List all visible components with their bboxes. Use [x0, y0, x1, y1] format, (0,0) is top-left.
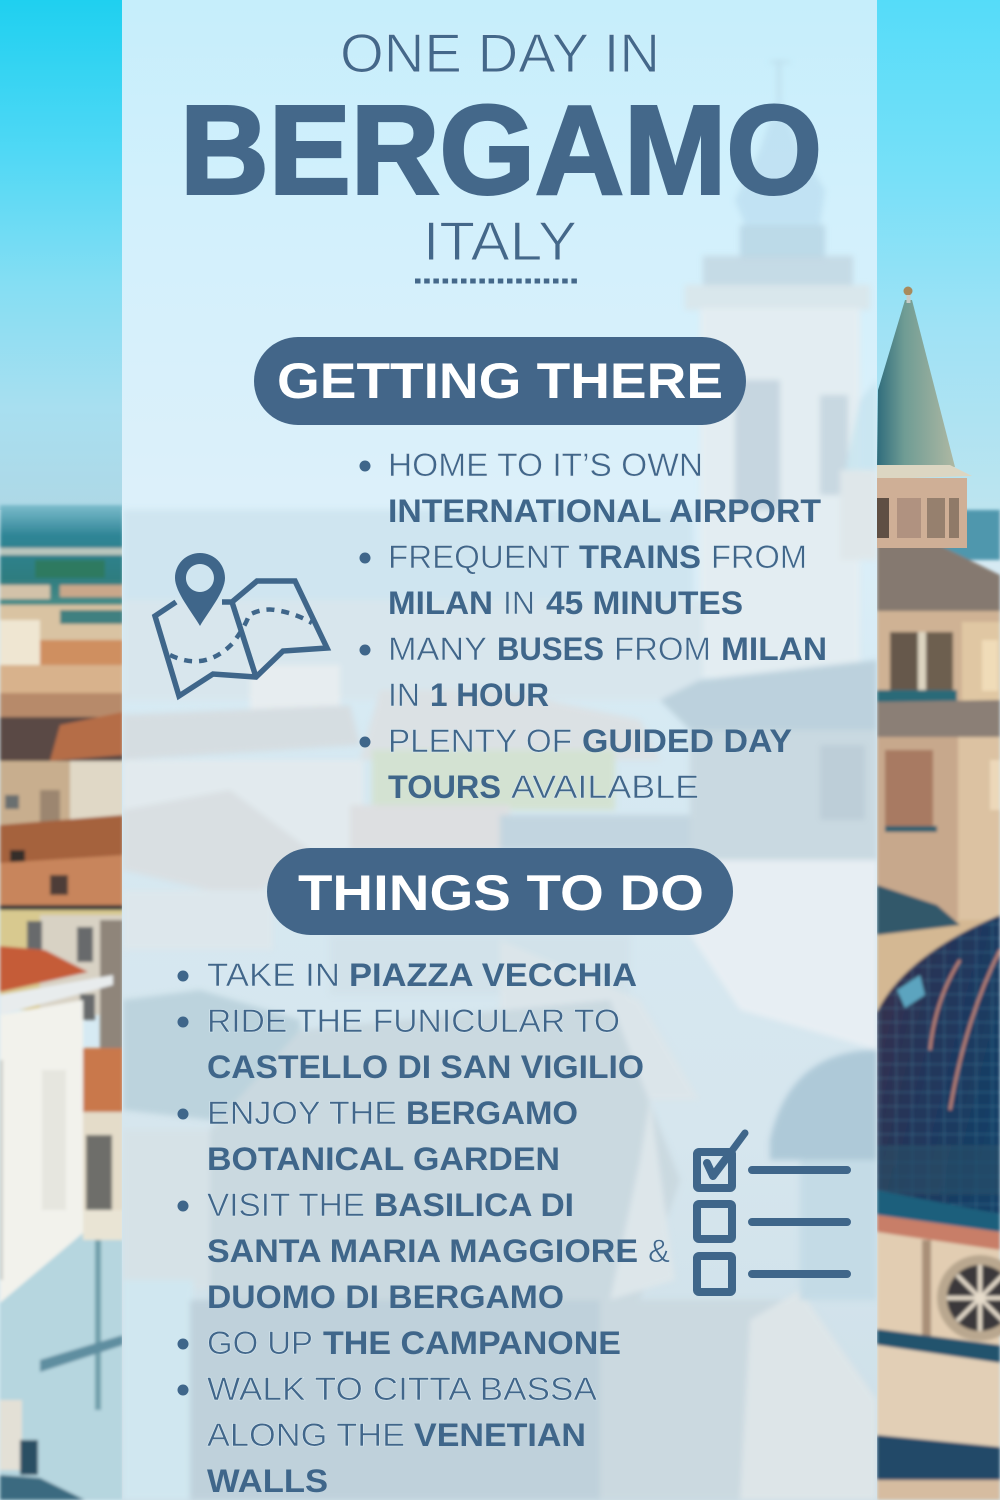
title line: Italy: ITALY — [423, 210, 577, 272]
bullet: campanone: THE CAMPANONE — [323, 1325, 621, 1361]
heading pill: things to do — [267, 848, 733, 935]
ghosted photo behind the panel — [123, 60, 877, 1500]
bullet: venetian walls: ALONG THE — [207, 1417, 405, 1453]
bullet: buses — [360, 631, 827, 713]
bullet: campanone: GO UP — [207, 1325, 313, 1361]
heading pill: things to do: THINGS TO DO — [298, 865, 704, 921]
bullet: botanical garden — [178, 1095, 578, 1177]
bullet: airport — [360, 447, 821, 529]
bullet: airport: HOME TO IT’S OWN — [388, 447, 703, 483]
bullet: venetian walls: VENETIAN — [414, 1417, 586, 1453]
bullet: trains: IN — [503, 585, 535, 621]
bullet: tours: AVAILABLE — [511, 769, 699, 805]
bullet: airport: INTERNATIONAL AIRPORT — [388, 493, 821, 529]
bullet: buses: MILAN — [721, 631, 827, 667]
bullet: buses: BUSES — [497, 631, 604, 667]
bullet: Piazza Vecchia: PIAZZA VECCHIA — [349, 957, 637, 993]
bullet: funicular: CASTELLO DI SAN VIGILIO — [207, 1049, 644, 1085]
heading pill: getting there: GETTING THERE — [277, 353, 723, 409]
bullet: basilica and duomo — [178, 1187, 670, 1315]
bullet: tours: PLENTY OF — [388, 723, 572, 759]
church spire — [877, 286, 972, 548]
bullet: buses: 1 HOUR — [430, 677, 549, 713]
heading pill: getting there — [254, 337, 746, 425]
icon: map with location pin — [155, 553, 327, 696]
bullet: trains: FREQUENT — [388, 539, 570, 575]
bullet: trains: TRAINS — [579, 539, 701, 575]
bullet: trains: 45 MINUTES — [546, 585, 743, 621]
bullet: funicular — [178, 1003, 644, 1085]
bullet: funicular: RIDE THE FUNICULAR TO — [207, 1003, 620, 1039]
background photo: left side city view — [0, 0, 123, 1500]
bullet: trains: FROM — [711, 539, 807, 575]
bullet: basilica and duomo: DUOMO DI BERGAMO — [207, 1279, 564, 1315]
title — [180, 22, 822, 272]
bullet: basilica and duomo: SANTA MARIA MAGGIORE — [207, 1233, 638, 1269]
bullet: basilica and duomo: VISIT THE — [207, 1187, 365, 1223]
bullet: botanical garden: BOTANICAL GARDEN — [207, 1141, 560, 1177]
bullet: basilica and duomo: & — [648, 1233, 670, 1269]
list: things to do — [178, 957, 670, 1499]
icon: checklist — [697, 1133, 847, 1292]
bullet: Piazza Vecchia: TAKE IN — [207, 957, 340, 993]
bullet: tours: GUIDED DAY — [582, 723, 792, 759]
list: getting there — [360, 447, 827, 805]
background photo: right side cathedral — [877, 0, 1000, 1500]
bullet: botanical garden: BERGAMO — [406, 1095, 578, 1131]
bullet: campanone — [178, 1325, 621, 1361]
bullet: venetian walls: WALLS — [207, 1463, 328, 1499]
bullet: tours: TOURS — [388, 769, 501, 805]
bullet: venetian walls: WALK TO CITTA BASSA — [207, 1371, 598, 1407]
bullet: Piazza Vecchia — [178, 957, 637, 993]
bullet: trains — [360, 539, 807, 621]
bullet: buses: MANY — [388, 631, 487, 667]
title line: one day in: ONE DAY IN — [340, 22, 660, 84]
bullet: tours — [360, 723, 792, 805]
bullet: buses: IN — [388, 677, 420, 713]
bullet: basilica and duomo: BASILICA DI — [374, 1187, 574, 1223]
bullet: trains: MILAN — [388, 585, 493, 621]
bullet: buses: FROM — [614, 631, 711, 667]
bullet: venetian walls — [178, 1371, 598, 1499]
title line: Bergamo: BERGAMO — [180, 80, 822, 220]
bullet: botanical garden: ENJOY THE — [207, 1095, 397, 1131]
translucent centre panel — [122, 0, 877, 1500]
